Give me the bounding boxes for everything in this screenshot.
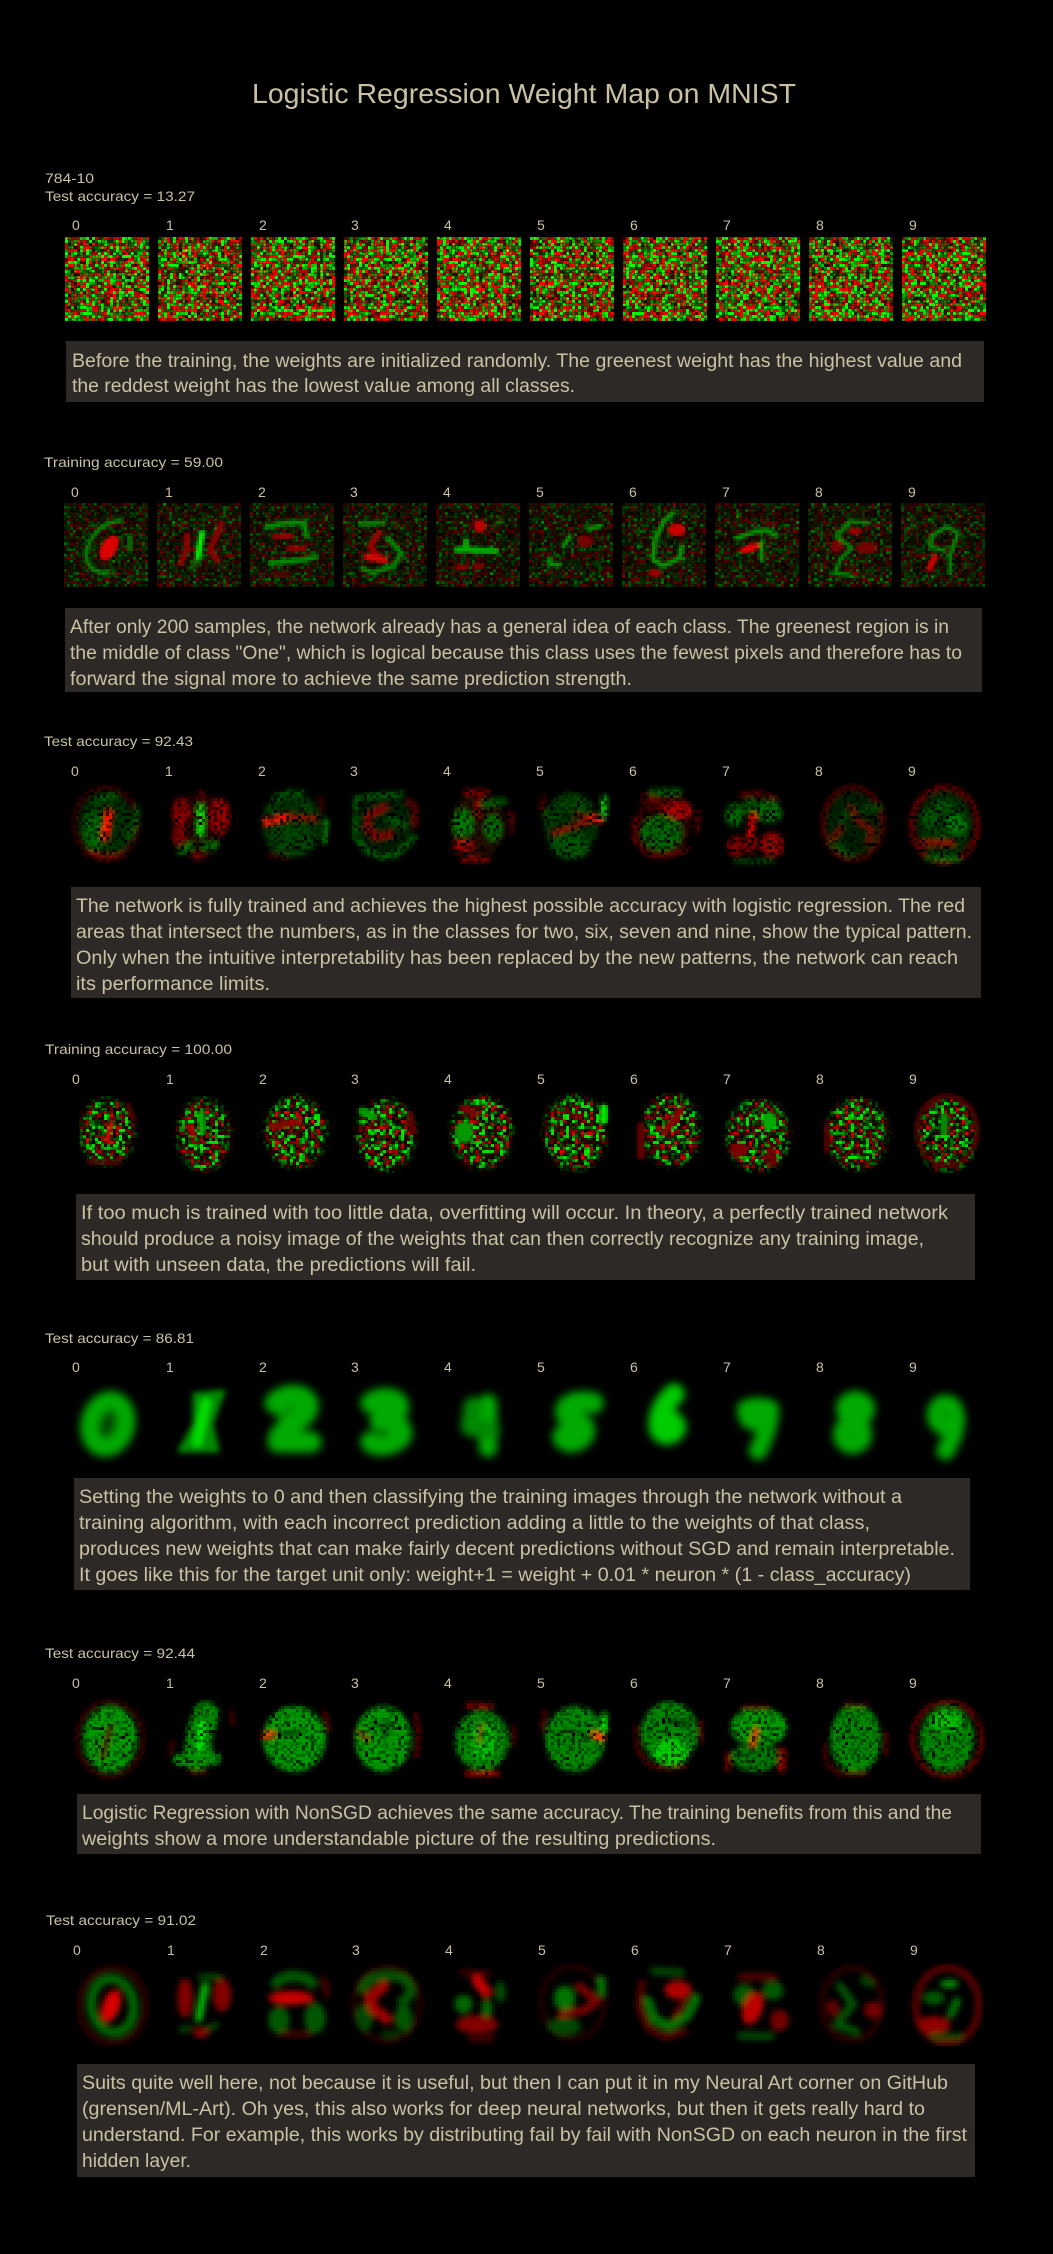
tile 5 [544,1096,606,1170]
text panel: fully trained: its performance limits. [76,974,270,995]
tile 3 [371,1399,402,1445]
tile 3 [355,792,415,858]
heading: training accuracy 59.00: Training accuracy = 59.00 [44,454,223,470]
class labels row 1: 0123456789 [72,217,917,233]
text panel: no SGD [74,1478,970,1590]
tile 8 [827,1098,887,1170]
weight maps: after 200 samples [64,503,985,587]
tile 9 [916,1968,979,2043]
tile 6 [641,1094,700,1166]
text panel: fully trained: areas that intersect the numbers, as in the classes for two, six, seven and nine, show the typical pattern. [76,922,972,943]
tile 2 [263,1706,329,1772]
text panel: random initialisation: Before the training, the weights are initialized randomly. The greenest weight has the highest value and [72,351,962,372]
tile 9 [912,1702,982,1776]
tile 8 [842,1400,866,1445]
tile 9 [935,1403,956,1451]
tile 1 [170,1712,233,1772]
tile 1 [178,1977,231,2032]
heading: test accuracy 91.02: Test accuracy = 91.02 [46,1912,196,1928]
heading: test accuracy 86.81: Test accuracy = 86.81 [45,1330,194,1346]
tile 4 [452,1096,512,1170]
tile 0 [84,1396,131,1452]
tile 3 [354,1966,420,2042]
heading: test accuracy 92.43: Test accuracy = 92.43 [44,733,193,749]
tile 5 [541,792,604,860]
text panel: neural art: Suits quite well here, not because it is useful, but then I can put it in my Neural Art corner on GitHub [82,2073,948,2094]
text panel: neural art: understand. For example, this works by distributing fail by fail with NonSGD on each neuron in the first [82,2125,968,2146]
tile 6 [639,1971,696,2037]
text panel: NonSGD [77,1794,981,1854]
text panel: NonSGD: weights show a more understandable picture of the resulting predictions. [81,1829,716,1850]
tile 4 [470,1403,491,1448]
heading: test accuracy 92.44: Test accuracy = 92.44 [45,1645,195,1661]
tile 7 [746,1407,770,1451]
class labels row 2: 0123456789 [71,484,916,500]
weight maps: neural art [80,1966,979,2043]
text panel: after 200 samples: forward the signal more to achieve the same prediction strength. [70,669,632,690]
tile 1 [172,792,230,858]
text panel: fully trained: Only when the intuitive interpretability has been replaced by the new patterns, the network can reach [76,948,958,969]
text panel: after 200 samples: the middle of class "One", which is logical because this class uses the fewest pixels and therefore has to [70,643,962,664]
tile 5 [542,1966,604,2038]
text panel: fully trained: The network is fully trained and achieves the highest possible accuracy with logistic regression. The red [76,896,965,917]
tile 4 [436,503,520,587]
text panel: after 200 samples: After only 200 samples, the network already has a general idea of each class. The greenest region is in [70,617,949,638]
tile 4 [451,792,511,860]
weight maps: logistic regression with NonSGD [77,1702,982,1776]
text panel: no SGD: produces new weights that can make fairly decent predictions without SGD and remain interpretable. [79,1539,955,1560]
heading: training accuracy 100.00: Training accuracy = 100.00 [45,1041,232,1057]
tile 1 [179,1391,224,1451]
text panel: fully trained [71,887,981,998]
weight maps: fully trained [74,788,978,862]
text panel: no SGD: It goes like this for the target unit only: weight+1 = weight + 0.01 * neuron * (1 - class_accuracy) [79,1565,911,1586]
text panel: neural art [77,2064,975,2177]
tile 6 [659,1394,676,1434]
tile 1 [157,503,241,587]
class labels row 5: 0123456789 [72,1359,917,1375]
weight maps: overfitting [80,1094,977,1172]
text panel: no SGD: training algorithm, with each incorrect prediction adding a little to the weights of that class, [79,1513,870,1534]
text panel: NonSGD: Logistic Regression with NonSGD achieves the same accuracy. The training benefits from this and the [82,1803,952,1824]
text panel: random initialisation: the reddest weight has the lowest value among all classes. [72,376,575,397]
tile 8 [823,788,883,860]
title: Logistic Regression Weight Map on MNIST [252,78,796,109]
tile 5 [542,1706,605,1772]
tile 7 [728,1708,787,1772]
tile 0 [64,503,148,587]
tile 6 [622,503,706,587]
text panel: neural art: hidden layer. [82,2151,191,2172]
weight maps: random initialisation [65,237,986,321]
tile 2 [268,1976,327,2034]
tile 2 [275,1391,311,1442]
tile 9 [917,1096,977,1172]
class labels row 7: 0123456789 [73,1942,918,1958]
tile 7 [726,794,784,861]
text panel: after 200 samples [65,608,982,692]
tile 3 [354,1706,419,1772]
tile 1 [178,1099,230,1171]
text panel: overfitting: but with unseen data, the predictions will fail. [81,1255,476,1276]
tile 2 [266,1096,326,1168]
text panel: neural art: (grensen/ML-Art). Oh yes, this also works for deep neural networks, but then it gets really hard to [82,2099,925,2120]
tile 4 [455,1706,514,1774]
tile 0 [77,1702,143,1776]
tile 9 [901,503,985,587]
tile 8 [808,503,892,587]
heading: network shape: 784-10 [45,170,94,186]
text panel: random initialisation [66,341,984,402]
tile 3 [357,1099,415,1171]
weight maps: no SGD averaged digits [84,1391,956,1452]
text panel: no SGD: Setting the weights to 0 and then classifying the training images through the network without a [79,1487,902,1508]
tile 2 [262,792,326,858]
text panel: overfitting [76,1194,975,1280]
tile 0 [80,1099,134,1165]
tile 9 [912,788,978,862]
tile 2 [250,503,334,587]
tile 7 [734,1977,788,2036]
tile 5 [563,1402,593,1442]
tile 0 [74,788,138,860]
class labels row 3: 0123456789 [71,763,916,779]
class labels row 6: 0123456789 [72,1675,917,1691]
tile 8 [822,1968,882,2040]
heading: test accuracy 13.27: Test accuracy = 13.27 [45,188,195,204]
text panel: overfitting: If too much is trained with too little data, overfitting will occur. In theory, a perfectly trained network [81,1203,949,1224]
tile 3 [343,503,427,587]
tile 0 [80,1968,146,2043]
tile 5 [529,503,613,587]
class labels row 4: 0123456789 [72,1071,917,1087]
tile 7 [715,503,799,587]
tile 6 [636,1702,701,1769]
tile 7 [727,1100,789,1172]
tile 6 [635,789,698,856]
tile 8 [824,1704,886,1774]
text panel: overfitting: should produce a noisy image of the weights that can then correctly recognize any training image, [81,1229,924,1250]
tile 4 [454,1972,506,2038]
